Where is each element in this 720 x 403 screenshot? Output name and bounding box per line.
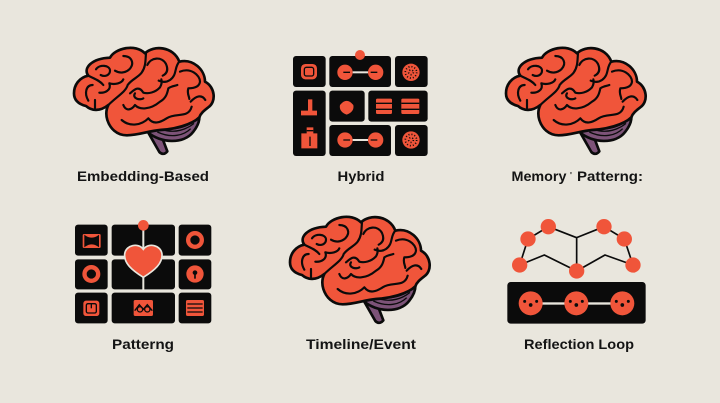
icon grid: patterng — [75, 220, 211, 323]
panel: Reflection Loop — [507, 219, 646, 352]
label: Timeline/Event: Timeline/Event — [306, 336, 416, 352]
panel: Patterng — [75, 220, 211, 352]
label: Memory Patterng: Memory — [512, 168, 567, 184]
loop bar with three nodes — [507, 282, 646, 324]
icon grid: hybrid — [293, 50, 428, 156]
panel: Hybrid — [293, 50, 428, 184]
icon: brain — [506, 48, 646, 154]
icon: brain — [74, 48, 214, 154]
label: Hybrid: Hybrid — [338, 168, 384, 184]
panel: Timeline/Event — [290, 217, 430, 352]
icon: brain — [290, 217, 430, 323]
panel: Memory Patterng — [506, 48, 646, 184]
label: Memory Patterng — [512, 168, 643, 184]
graph: connected nodes — [512, 219, 641, 279]
label: Memory Patterng: ' — [570, 171, 572, 180]
label: Reflection Loop: Reflection Loop — [524, 336, 634, 352]
label: Embedding-Based: Embedding-Based — [77, 168, 209, 184]
label: Patterng: Patterng — [112, 336, 174, 352]
panel: Embedding-Based — [74, 48, 214, 184]
label: Memory Patterng: Patterng: — [577, 168, 643, 184]
